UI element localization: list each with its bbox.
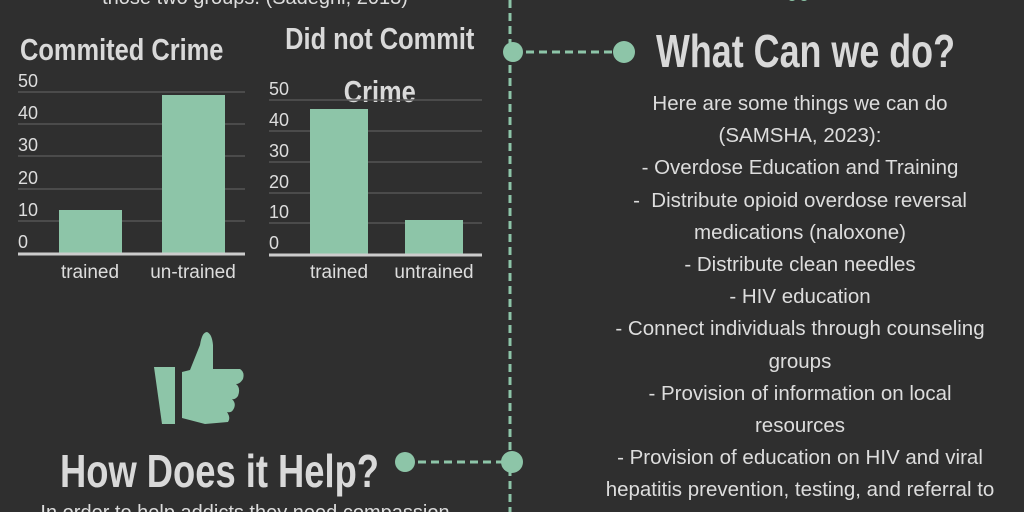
bar chart: committed crime bbox=[18, 71, 245, 283]
bar chart: committed crime: 40 bbox=[18, 103, 38, 123]
bar chart: committed crime: 50 bbox=[18, 71, 38, 91]
list: things we can do: - Distribute opioid overdose reversal bbox=[633, 189, 967, 212]
list: things we can do: - Distribute clean needles bbox=[684, 253, 916, 276]
chart title: Did not Commit Crime bbox=[285, 21, 474, 109]
bar chart: did not commit crime: trained bbox=[310, 262, 368, 283]
bar chart: did not commit crime: 40 bbox=[269, 110, 289, 130]
bar chart: committed crime: un-trained bbox=[150, 262, 236, 283]
list: things we can do bbox=[606, 92, 994, 501]
bar chart: did not commit crime: 50 bbox=[269, 79, 289, 99]
bar chart: did not commit crime: 20 bbox=[269, 172, 289, 192]
heading: What Can we do?: What Can we do? bbox=[656, 25, 955, 77]
top quote mark bbox=[789, 0, 807, 1]
chart title: Did not Commit Crime: Crime bbox=[344, 74, 416, 109]
bar chart: did not commit crime: untrained bbox=[394, 262, 474, 283]
list: things we can do: - HIV education bbox=[729, 285, 871, 308]
chart title: Commited Crime: Commited Crime bbox=[20, 32, 223, 67]
list: things we can do: - Connect individuals through counseling bbox=[615, 317, 985, 340]
list: things we can do: medications (naloxone) bbox=[694, 221, 906, 244]
list: things we can do: - Overdose Education and Training bbox=[642, 156, 958, 179]
list: things we can do: resources bbox=[755, 414, 845, 437]
bar chart: did not commit crime: 30 bbox=[269, 141, 289, 161]
bar chart: did not commit crime: 10 bbox=[269, 202, 289, 222]
list: things we can do: - Provision of information on local bbox=[648, 382, 952, 405]
heading: How Does it Help?: How Does it Help? bbox=[60, 445, 379, 497]
list: things we can do: Here are some things we can do bbox=[652, 92, 948, 115]
list: things we can do: - Provision of education on HIV and viral bbox=[617, 446, 983, 469]
bar chart: committed crime: 0 bbox=[18, 232, 28, 252]
bar chart: did not commit crime bbox=[269, 79, 482, 283]
bar chart: committed crime: trained bbox=[61, 262, 119, 283]
list: things we can do: groups bbox=[769, 350, 831, 373]
list: things we can do: hepatitis prevention, testing, and referral to bbox=[606, 478, 994, 501]
bar chart: committed crime: 30 bbox=[18, 135, 38, 155]
list: things we can do: (SAMSHA, 2023): bbox=[719, 124, 881, 147]
bar chart: did not commit crime: 0 bbox=[269, 233, 279, 253]
bar chart: committed crime: 10 bbox=[18, 200, 38, 220]
bar chart: committed crime: 20 bbox=[18, 168, 38, 188]
chart title: Did not Commit Crime: Did not Commit bbox=[285, 21, 474, 56]
icon: thumbs up bbox=[154, 332, 244, 424]
